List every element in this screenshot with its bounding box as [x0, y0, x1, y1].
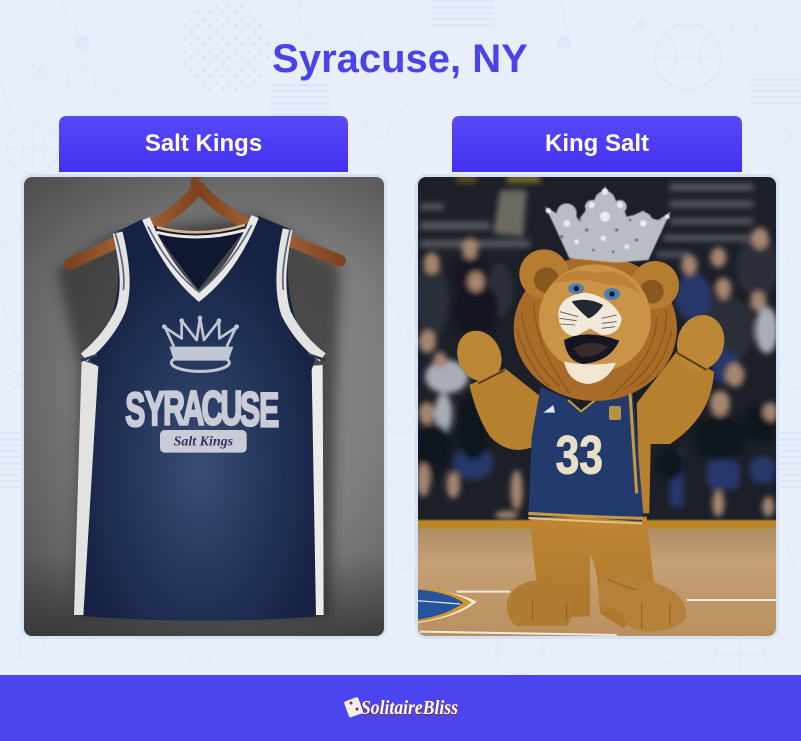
crown emblem	[162, 316, 239, 371]
logo: Solitaire Bliss: SolitaireBliss	[362, 698, 459, 720]
panel: King Salt	[415, 116, 780, 638]
wooden hanger	[70, 175, 340, 264]
heading tab: Salt Kings	[59, 116, 348, 172]
photo: lion mascot in crown and jersey 33 on court	[415, 175, 780, 638]
heading tab: King Salt	[452, 116, 742, 172]
panel: Salt Kings	[22, 116, 386, 638]
photo frame	[22, 176, 386, 638]
mascot jersey number 33	[528, 387, 643, 523]
bleachers and crowd	[415, 175, 780, 519]
mascot jersey number 33: 33	[556, 426, 603, 485]
logo: Solitaire Bliss: SolitaireBliss	[361, 697, 458, 719]
footer bar	[0, 675, 801, 741]
lion mascot	[449, 249, 730, 632]
basketball court floor	[417, 520, 778, 638]
title: Syracuse, NY	[272, 37, 528, 81]
heading tab: Salt Kings: Salt Kings	[145, 130, 262, 157]
jersey pill: Salt Kings: Salt Kings	[174, 434, 234, 449]
jersey pill: Salt Kings	[160, 430, 247, 453]
silver crown	[545, 186, 671, 263]
jersey wordmark: SYRACUSE: SYRACUSE	[125, 380, 279, 437]
heading tab: King Salt: King Salt	[545, 130, 649, 157]
photo: navy Salt Kings basketball jersey on hanger	[24, 175, 384, 636]
photo frame	[416, 176, 778, 638]
